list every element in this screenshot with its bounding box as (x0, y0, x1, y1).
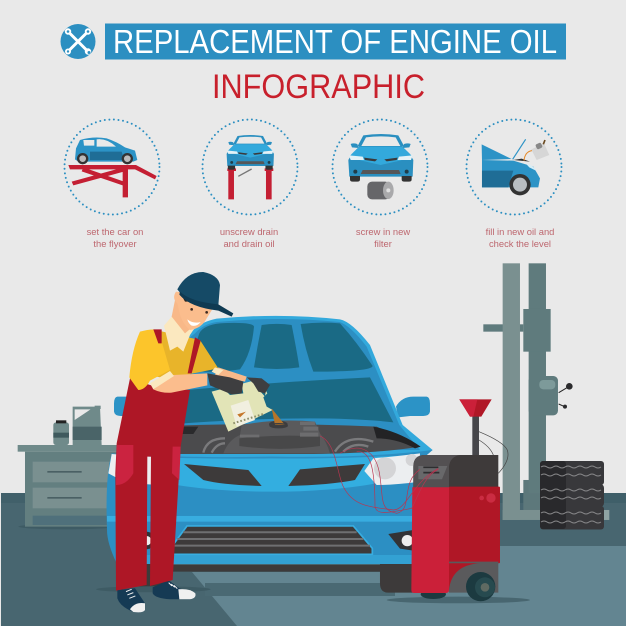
car (107, 316, 437, 593)
step 4: fill in new oil and check the level (466, 120, 562, 249)
right shoe (153, 580, 196, 599)
icon: car on lift with wrench (227, 135, 274, 199)
icon: small bottle (53, 420, 69, 445)
workbench with oil containers (18, 406, 118, 529)
oil jug (212, 379, 273, 432)
hoses to machine (320, 436, 438, 513)
icon: car and oil filter (348, 134, 413, 199)
cap (177, 272, 233, 317)
step 1: set the car on the flyover (64, 120, 160, 249)
step 2: unscrew drain and drain oil (202, 120, 298, 249)
near arm (150, 371, 207, 393)
caption: the flyover (93, 238, 137, 249)
title banner: REPLACEMENT OF ENGINE OIL (113, 23, 557, 60)
oil stream (272, 408, 285, 425)
gloves (207, 373, 270, 394)
left shoe (117, 588, 145, 612)
oil service machine (387, 399, 530, 603)
headlights (108, 453, 420, 485)
left mirror (114, 397, 147, 417)
right mirror (396, 397, 430, 417)
icon: crossed wrenches (60, 24, 96, 59)
head (174, 272, 233, 330)
subtitle: INFOGRAPHIC (212, 68, 425, 106)
icon: car on flyover (68, 137, 157, 197)
engine bay (147, 421, 421, 454)
shirt (129, 329, 218, 390)
caption: screw in new (356, 226, 410, 237)
icon: open hood car with oil can (482, 139, 549, 195)
caption: unscrew drain (220, 226, 278, 237)
air vents (184, 464, 365, 486)
floor shadow (96, 586, 211, 592)
caption: filter (374, 238, 392, 249)
red overalls (115, 378, 190, 591)
radiator grille (173, 526, 372, 554)
tires (132, 563, 413, 593)
tire stack (540, 461, 604, 530)
raised hood and windshield (142, 316, 433, 458)
overall straps (153, 329, 201, 373)
caption: and drain oil (223, 238, 275, 249)
fog lights (140, 530, 413, 551)
front body (107, 450, 437, 572)
machine wheel (466, 572, 495, 601)
step 3: screw in new filter (332, 120, 428, 249)
caption: check the level (489, 238, 551, 249)
caption: fill in new oil and (486, 226, 554, 237)
forearm far (215, 367, 247, 382)
funnel and pipe (459, 399, 492, 457)
workshop floor (1, 493, 626, 626)
caption: set the car on (87, 226, 143, 237)
neck and collar (164, 317, 193, 352)
car lift (483, 263, 609, 520)
icon: oil jug (73, 406, 102, 445)
mechanic (96, 272, 287, 612)
